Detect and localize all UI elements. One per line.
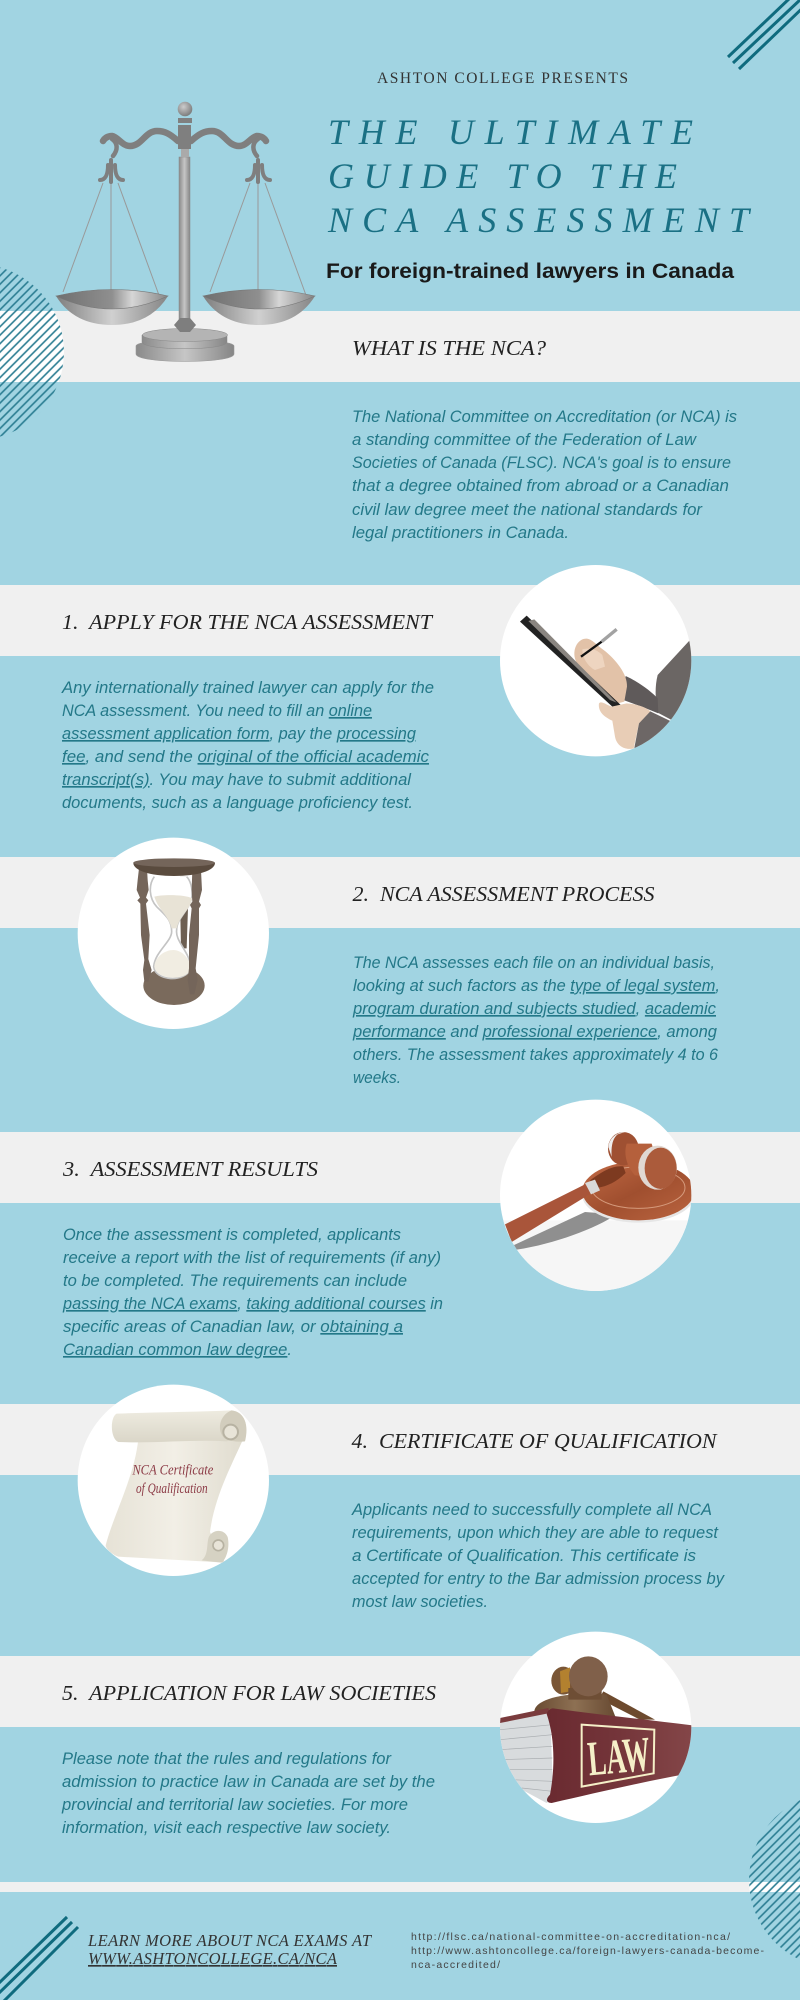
title: NCA ASSESSMENT xyxy=(327,200,752,240)
panel: step 4 certificate xyxy=(0,1385,800,1611)
heading: 5. APPLICATION FOR LAW SOCIETIES xyxy=(62,1681,437,1705)
body text: program duration and subjects studied, academic xyxy=(352,1000,717,1018)
panel: step 5 law societies xyxy=(0,1632,800,1837)
body text: provincial and territorial law societies. For more xyxy=(61,1796,408,1814)
heading: WHAT IS THE NCA? xyxy=(352,336,547,360)
body text xyxy=(62,1226,443,1359)
body text: Please note that the rules and regulations for xyxy=(62,1750,392,1768)
footer call to action: WWW.ASHTONCOLLEGE.CA/NCA xyxy=(88,1949,338,1968)
body text: accepted for entry to the Bar admission process by xyxy=(352,1570,726,1588)
panel: step 1 apply xyxy=(0,565,800,812)
body text: requirements, upon which they are able to request xyxy=(352,1524,719,1542)
icon: law book and gavel: LAW xyxy=(585,1726,652,1786)
panel: what is the NCA xyxy=(352,336,737,542)
icon: hourglass xyxy=(78,838,269,1029)
body text: Canadian common law degree. xyxy=(63,1341,292,1359)
body text: documents, such as a language proficiency test. xyxy=(62,794,413,812)
what is the NCA heading band xyxy=(0,311,800,382)
body text: that a degree obtained from abroad or a Canadian xyxy=(352,477,729,495)
body text: performance and professional experience, among xyxy=(352,1023,718,1041)
body text: Once the assessment is completed, applicants xyxy=(63,1226,401,1244)
body text xyxy=(61,679,434,812)
scroll text xyxy=(131,1463,214,1497)
footer call to action: LEARN MORE ABOUT NCA EXAMS AT xyxy=(87,1931,373,1950)
panel: step 3 results xyxy=(0,1100,800,1359)
hatched circle left xyxy=(0,267,64,437)
body text xyxy=(352,954,720,1087)
footer references: nca-accredited/ xyxy=(411,1959,500,1971)
heading: 4. CERTIFICATE OF QUALIFICATION xyxy=(352,1429,718,1453)
hatched circle right xyxy=(749,1800,800,1958)
body text: The National Committee on Accreditation (or NCA) is xyxy=(352,408,737,426)
scroll text: of Qualification xyxy=(136,1481,208,1497)
presenter line: ASHTON COLLEGE PRESENTS xyxy=(377,70,628,87)
body text: to be completed. The requirements can include xyxy=(63,1272,407,1290)
body text: Societies of Canada (FLSC). NCA's goal is to ensure xyxy=(352,454,731,472)
icon: scales of justice xyxy=(56,102,315,361)
body text: passing the NCA exams, taking additional courses in xyxy=(62,1295,443,1313)
body text: looking at such factors as the type of legal system, xyxy=(353,977,720,995)
icon: law book and gavel xyxy=(500,1632,692,1823)
scroll text: NCA Certificate xyxy=(131,1463,214,1479)
body text: civil law degree meet the national standards for xyxy=(352,501,704,519)
heading: 1. APPLY FOR THE NCA ASSESSMENT xyxy=(62,610,433,634)
footer references: http://www.ashtoncollege.ca/foreign-lawyers-canada-become- xyxy=(411,1945,764,1957)
subtitle: For foreign-trained lawyers in Canada xyxy=(326,260,734,283)
footer references xyxy=(411,1931,764,1971)
body text xyxy=(351,1501,726,1611)
title xyxy=(327,112,752,240)
body text: The NCA assesses each file on an individual basis, xyxy=(353,954,715,972)
heading: 2. NCA ASSESSMENT PROCESS xyxy=(352,882,655,906)
body text: fee, and send the original of the official academic xyxy=(62,748,430,766)
body text: Applicants need to successfully complete all NCA xyxy=(351,1501,712,1519)
body text: weeks. xyxy=(353,1069,401,1087)
heading band xyxy=(0,585,800,656)
icon: hand writing on clipboard xyxy=(500,565,698,756)
body text: transcript(s). You may have to submit additional xyxy=(62,771,412,789)
body text xyxy=(61,1750,435,1837)
heading band xyxy=(0,1132,800,1203)
heading band xyxy=(0,1656,800,1727)
body text: most law societies. xyxy=(352,1593,488,1611)
decorative corner stripes bottom left xyxy=(0,1917,78,2000)
footer references: http://flsc.ca/national-committee-on-accreditation-nca/ xyxy=(411,1931,730,1943)
icon: certificate scroll xyxy=(78,1385,269,1576)
body text: others. The assessment takes approximately 4 to 6 xyxy=(353,1046,719,1064)
body text: information, visit each respective law society. xyxy=(62,1819,391,1837)
heading: 3. ASSESSMENT RESULTS xyxy=(62,1157,319,1181)
body text: a standing committee of the Federation of Law xyxy=(352,431,697,449)
panel: step 2 process xyxy=(0,838,800,1087)
body text: specific areas of Canadian law, or obtaining a xyxy=(63,1318,403,1336)
body text xyxy=(352,408,737,542)
body text: admission to practice law in Canada are set by the xyxy=(62,1773,435,1791)
body text: receive a report with the list of requirements (if any) xyxy=(63,1249,441,1267)
body text: assessment application form, pay the processing xyxy=(62,725,417,743)
footer call to action xyxy=(87,1931,373,1968)
heading band xyxy=(0,1404,800,1475)
body text: a Certificate of Qualification. This certificate is xyxy=(352,1547,696,1565)
thin divider band xyxy=(0,1882,800,1892)
decorative corner stripes top right xyxy=(728,0,800,69)
title: THE ULTIMATE xyxy=(328,112,693,152)
icon: gavel xyxy=(495,1100,695,1297)
body text: legal practitioners in Canada. xyxy=(352,524,569,542)
heading band xyxy=(0,857,800,928)
body text: NCA assessment. You need to fill an online xyxy=(62,702,372,720)
body text: Any internationally trained lawyer can apply for the xyxy=(61,679,434,697)
title: GUIDE TO THE xyxy=(328,156,677,196)
